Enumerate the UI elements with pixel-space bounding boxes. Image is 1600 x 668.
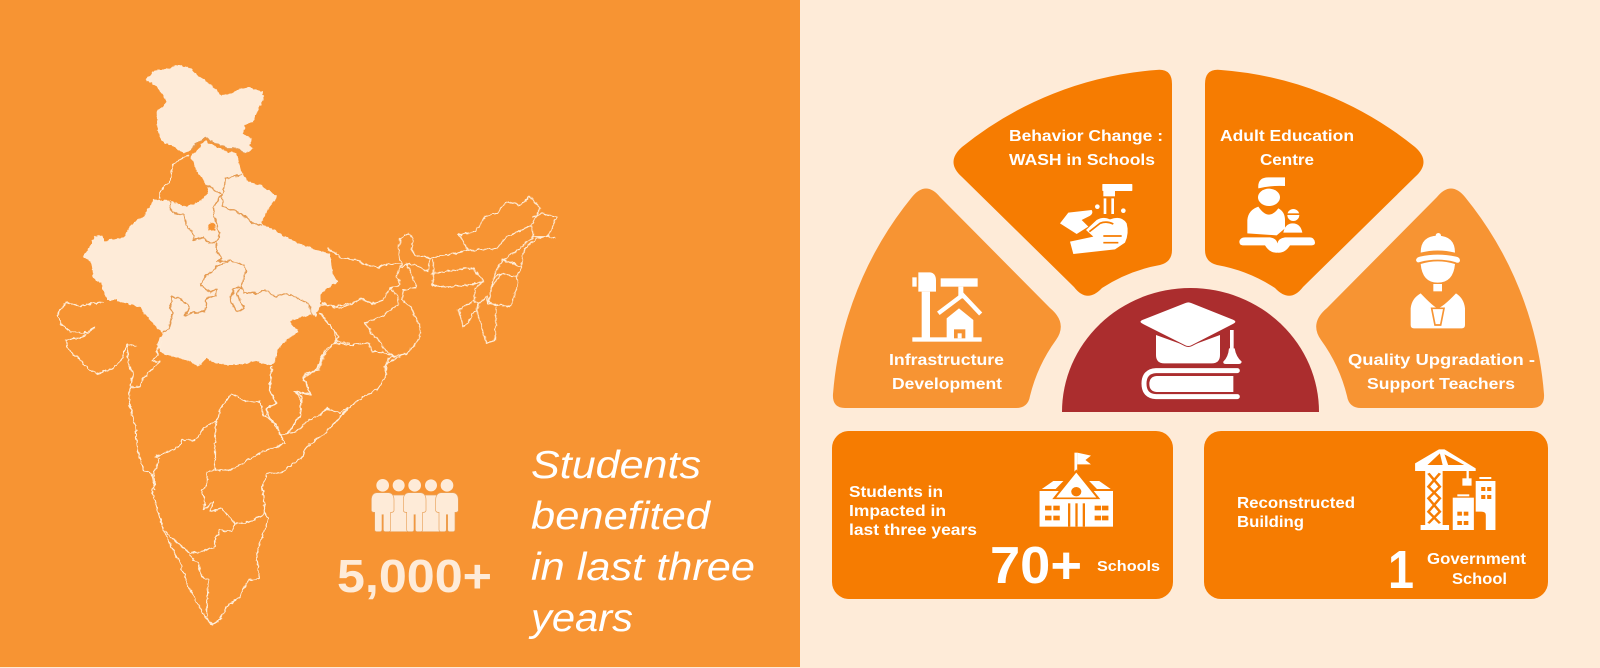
label: government school xyxy=(1427,551,1527,588)
segment: adult education centre xyxy=(1205,70,1424,296)
label xyxy=(1348,352,1535,393)
panel: left orange reach panel xyxy=(0,0,800,667)
icon: hand washing xyxy=(1060,184,1132,254)
map: western outlines xyxy=(57,302,350,490)
big number: schools: 70+ xyxy=(990,537,1082,595)
label: Behavior Change : xyxy=(1009,128,1163,145)
label: Quality Upgradation - xyxy=(1348,352,1535,369)
text: students benefited caption: in last three xyxy=(531,546,755,589)
text: students benefited caption: benefited xyxy=(531,495,711,538)
icon: crane and buildings xyxy=(1415,449,1495,530)
segment: behavior change WASH in schools xyxy=(954,70,1172,296)
icon: teacher with cap and whistle xyxy=(1411,233,1465,328)
label: Development xyxy=(892,376,1003,393)
text: students impacted description: Students in xyxy=(849,484,943,501)
label xyxy=(1220,128,1354,169)
text: reconstructed building description: Reconstructed xyxy=(1237,495,1355,512)
text: students impacted description xyxy=(849,484,977,539)
panel: semicircle programme wheel xyxy=(833,70,1544,412)
label: Infrastructure xyxy=(889,352,1004,369)
segment: quality upgradation support teachers xyxy=(1316,188,1544,408)
label: WASH in Schools xyxy=(1009,152,1155,169)
map: southern outlines xyxy=(152,350,400,625)
icon: group of people xyxy=(371,479,458,532)
text: students impacted description: last three years xyxy=(849,522,977,539)
text: students benefited caption xyxy=(528,444,755,640)
segment: infrastructure development xyxy=(833,188,1061,408)
map: highlighted northern states xyxy=(83,65,339,367)
label: Support Teachers xyxy=(1367,376,1515,393)
big number: government school: 1 xyxy=(1388,540,1414,600)
centre: red semicircle hub xyxy=(1062,288,1319,412)
card: schools impacted xyxy=(832,431,1173,599)
label: government school: Government xyxy=(1427,551,1527,568)
text: reconstructed building description xyxy=(1237,495,1355,531)
icon: house construction xyxy=(912,272,982,342)
card: reconstructed building xyxy=(1204,431,1548,600)
icon: adult reading with child xyxy=(1239,177,1315,253)
text: students benefited caption: years xyxy=(528,597,633,640)
label: Centre xyxy=(1260,152,1314,169)
label: Adult Education xyxy=(1220,128,1354,145)
label xyxy=(889,352,1004,393)
label: schools: Schools xyxy=(1097,558,1160,575)
text: students benefited caption: Students xyxy=(531,444,701,487)
text: students impacted description: Impacted in xyxy=(849,503,946,520)
label: government school: School xyxy=(1452,571,1507,588)
icon: school building xyxy=(1040,453,1113,527)
text: reconstructed building description: Building xyxy=(1237,514,1304,531)
big number: students: 5,000+ xyxy=(337,550,492,602)
icon: graduation cap on book xyxy=(1140,302,1242,397)
map of India xyxy=(57,65,557,625)
label xyxy=(1009,128,1163,169)
map: eastern and north-eastern outlines xyxy=(303,197,557,380)
